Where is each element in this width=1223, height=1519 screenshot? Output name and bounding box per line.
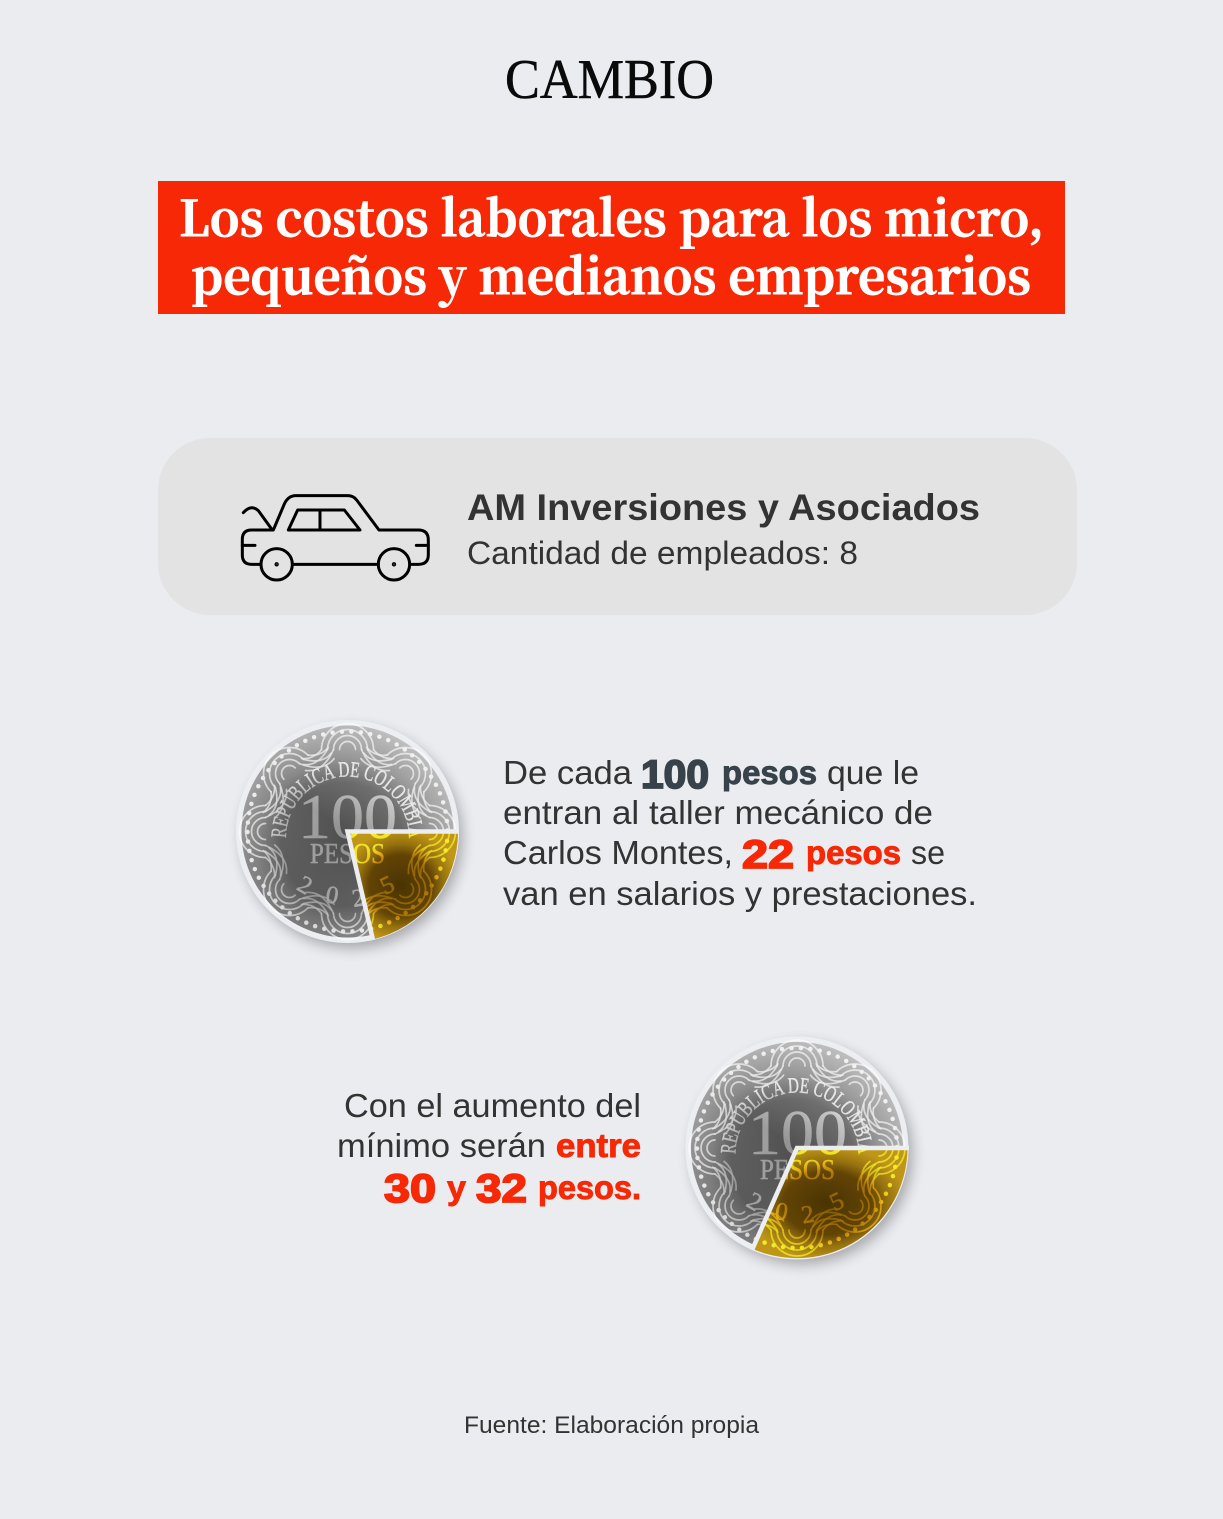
text block: 100 pesos: 22 [742,833,794,877]
text block: 100 pesos: pesos [722,754,817,791]
coin chart: 22 of 100 pesos: 2 [292,871,317,900]
coin chart: 22 of 100 pesos: PESOS [310,839,385,870]
text block: 100 pesos: que le [827,754,919,791]
coin chart: 30 to 32 pesos: 2 [799,1201,816,1229]
coin chart: 22 of 100 pesos: 5 [376,871,399,900]
text block: 30 y 32 pesos: entre [556,1127,641,1164]
coin chart: 30 to 32 pesos: 100 [748,1097,847,1168]
text block: 100 pesos: De cada [503,754,633,791]
employee count: Cantidad de empleados: 8 [467,535,858,571]
title banner [158,181,1065,314]
coin chart: 30 to 32 pesos: 5 [826,1187,848,1217]
coin chart: 30 to 32 pesos: REPUBLICA DE COLOMBIA [720,1078,872,1154]
coin chart: 22 of 100 pesos: 2 [350,884,367,913]
text block: 100 pesos: van en salarios y prestaciones. [503,875,977,912]
text block: 30 y 32 pesos: mínimo serán [337,1127,546,1164]
coin chart: 30 to 32 pesos: 2 [742,1187,766,1217]
text block: 30 y 32 pesos: 32 [476,1167,527,1211]
coin chart: 30 to 32 pesos [684,1036,920,1272]
coin chart: 30 to 32 pesos: PESOS [760,1155,835,1186]
text block: 100 pesos: Carlos Montes, [503,834,733,871]
title banner: Los costos laborales para los micro, [179,181,1044,251]
text block: 100 pesos: 100 [641,753,709,797]
coin chart: 22 of 100 pesos: REPUBLICA DE COLOMBIA [271,762,422,838]
text block: 30 y 32 pesos: pesos. [538,1169,641,1206]
text block: 30 y 32 pesos [337,1087,641,1211]
coin chart: 22 of 100 pesos: 0 [324,881,341,910]
title banner: pequeños y medianos empresarios [191,239,1031,309]
text block: 100 pesos: pesos [806,834,901,871]
logo: CAMBIO: CAMBIO [505,49,714,111]
coin chart: 22 of 100 pesos: 100 [298,781,397,852]
coin chart: 22 of 100 pesos [234,720,470,956]
company name: AM Inversiones y Asociados [467,487,980,528]
text block: 100 pesos [503,753,977,912]
text block: 100 pesos: entran al taller mecánico de [503,794,933,831]
text block: 30 y 32 pesos: Con el aumento del [344,1087,641,1124]
source note: Fuente: Elaboración propia [464,1412,760,1439]
coin chart: 30 to 32 pesos: 0 [773,1198,790,1227]
text block: 100 pesos: se [911,834,945,871]
panel: company [158,438,1077,615]
text block: 30 y 32 pesos: y [447,1169,467,1206]
text block: 30 y 32 pesos: 30 [384,1167,436,1211]
icon: car with open hood [242,496,428,580]
